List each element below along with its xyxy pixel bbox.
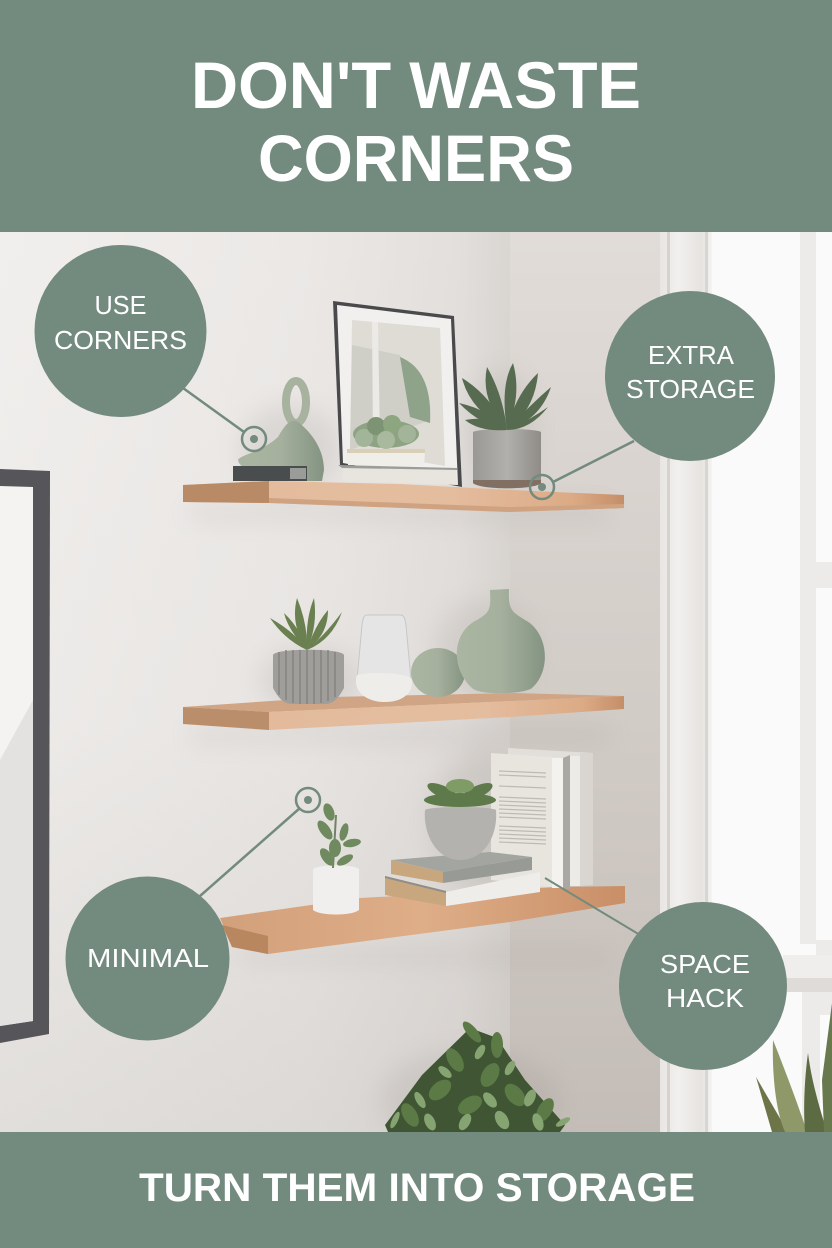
callout: minimal: MINIMAL [87, 943, 209, 973]
glass vase [356, 615, 412, 702]
sage vase [457, 589, 545, 693]
callout: space hack [545, 878, 787, 1070]
callout: use corners: USE [94, 290, 146, 320]
callout: extra storage: STORAGE [626, 374, 755, 404]
ribbed pot plant [270, 598, 344, 704]
floor plant [385, 1019, 571, 1132]
callout: extra storage: EXTRA [648, 340, 735, 370]
bottom shelf with objects [220, 748, 625, 954]
succulent stone pot [424, 779, 496, 860]
middle shelf with objects [183, 589, 624, 730]
mirror frame [0, 469, 50, 1043]
title banner [0, 0, 832, 232]
shelf 3 [220, 886, 625, 954]
succulent in frame [347, 415, 425, 466]
footer banner: TURN THEM INTO STORAGE [139, 1166, 695, 1210]
upright books [491, 748, 593, 889]
callout: space hack: SPACE [660, 949, 750, 979]
callout: minimal [66, 788, 320, 1040]
callout: extra storage [530, 291, 775, 499]
book stack [385, 852, 540, 906]
picture frame [333, 301, 462, 487]
potted plant top [459, 363, 551, 488]
title banner: DON'T WASTE [191, 48, 641, 122]
round sage stone [411, 648, 465, 697]
callout: use corners: CORNERS [54, 325, 187, 355]
title banner: CORNERS [258, 121, 574, 195]
white pot [313, 802, 362, 914]
rabbit vase [233, 381, 324, 481]
top shelf with objects [183, 301, 624, 512]
shelf 1 [183, 481, 624, 512]
shelf 2 [183, 693, 624, 730]
books under succulent [338, 465, 457, 485]
footer banner [0, 1132, 832, 1248]
wall background [0, 232, 832, 1150]
callout: space hack: HACK [666, 983, 745, 1013]
callout: use corners [34, 245, 266, 451]
snake plant [756, 1003, 832, 1132]
